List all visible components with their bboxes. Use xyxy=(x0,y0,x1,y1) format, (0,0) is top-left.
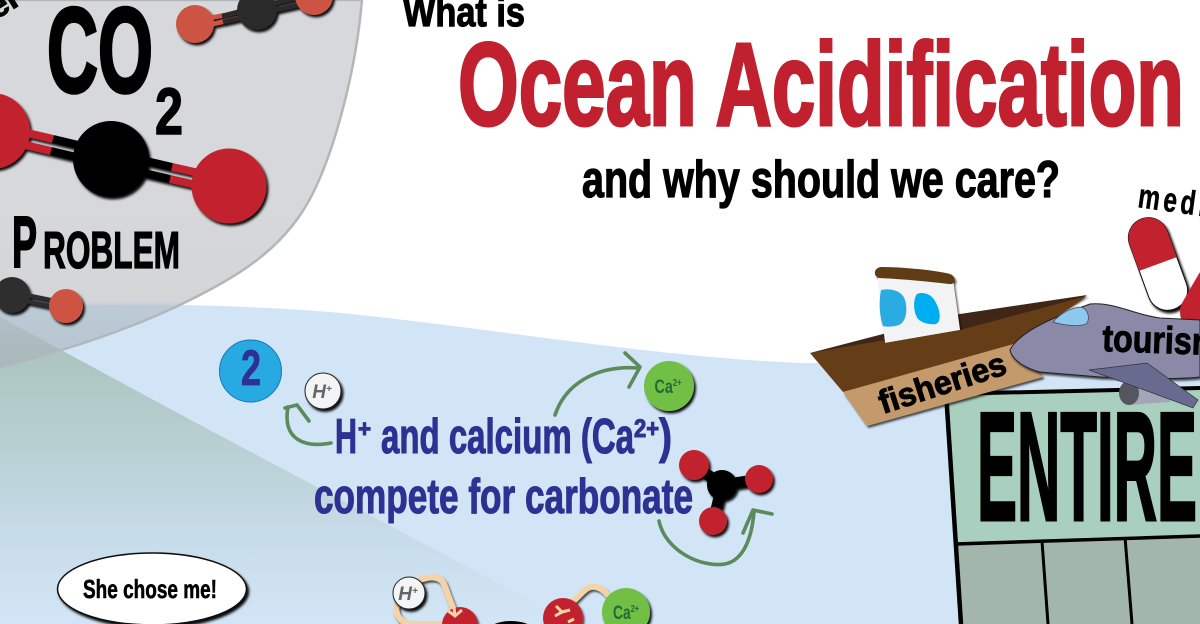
icon: carbonate holding hands with ions: 2+ xyxy=(631,604,639,615)
icon: medicine capsules xyxy=(1123,212,1200,339)
icon: hydrogen ion: + xyxy=(326,384,332,395)
icon: top CO2 molecule xyxy=(176,0,333,43)
icon: small CO2 molecule xyxy=(0,277,83,323)
panel: grey CO2 problem bubble xyxy=(0,0,362,367)
icon: plane wing xyxy=(1089,363,1198,408)
text: H+ and calcium compete: 2+ xyxy=(634,415,659,443)
icon: hydrogen ion xyxy=(305,373,341,409)
icon: capsule left xyxy=(1123,212,1193,316)
icon: fishing boat xyxy=(810,267,1087,426)
heading: Problem: P xyxy=(12,203,37,283)
icon: boat cabin xyxy=(875,267,960,343)
arrow: to hydrogen ion xyxy=(285,405,331,444)
text: H+ and calcium compete: ) xyxy=(659,410,672,464)
icon: arms xyxy=(396,577,608,624)
icon: carbonate holding hands with ions xyxy=(393,577,650,624)
text: H+ and calcium compete: and calcium (Ca xyxy=(381,410,635,464)
text: H+ and calcium compete: compete for carbonate xyxy=(314,470,693,524)
icon: carbonate holding hands with ions: Ca xyxy=(613,603,637,624)
icon: large CO2 molecule xyxy=(0,93,266,224)
icon: carbonate holding hands with ions: H xyxy=(398,584,412,605)
icon: airplane xyxy=(1010,304,1200,408)
heading: Problem: ROBLEM xyxy=(43,222,180,280)
text: H+ and calcium compete xyxy=(314,410,693,524)
icon: calcium ion: 2+ xyxy=(673,378,682,389)
icon: carbonate molecule xyxy=(679,450,773,535)
icon: calcium ion xyxy=(644,361,694,411)
panel: building ENTIRE xyxy=(945,380,1200,624)
icon: step number 2: 2 xyxy=(241,340,261,396)
icon: hydrogen ion: H xyxy=(312,382,326,403)
callout: She chose me: She chose me! xyxy=(83,574,217,604)
icon: step number 2 xyxy=(220,340,282,402)
arrow: to calcium ion xyxy=(555,353,640,415)
heading: Problem xyxy=(12,203,180,283)
panel: ocean background xyxy=(0,305,1200,624)
text: H+ and calcium compete: + xyxy=(358,416,371,443)
panel: teal deep-water wedge xyxy=(0,317,575,624)
text: H+ and calcium compete: H xyxy=(335,410,357,464)
icon: calcium ion: Ca xyxy=(654,377,679,398)
callout: She chose me xyxy=(58,553,246,624)
icon: carbonate holding hands with ions: + xyxy=(412,586,418,597)
heading: CO2 xyxy=(47,0,183,148)
arrow: to carbonate xyxy=(659,510,772,565)
subtitle: and why should we care: and why should we care? xyxy=(582,151,1060,209)
icon: capsule right xyxy=(1173,257,1200,339)
text: fisheries: fisheries xyxy=(874,345,1011,421)
icon: plane engine xyxy=(1119,381,1170,405)
heading: CO2: 2 xyxy=(155,74,183,148)
